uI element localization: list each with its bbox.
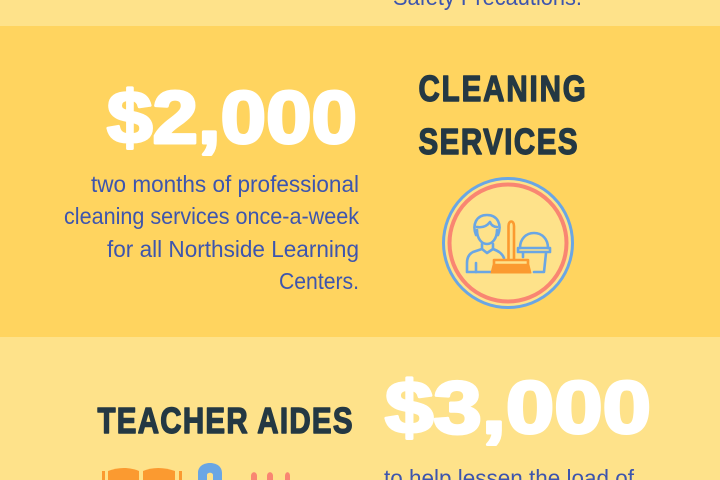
heading: cleaning services: SERVICES <box>418 121 578 162</box>
amount: $3,000: $3,000 <box>385 366 651 449</box>
icon: open book <box>102 468 182 480</box>
panel: teacher aides <box>0 337 720 480</box>
icon: blue arch <box>198 463 222 480</box>
icon: cleaner with broom and bucket <box>444 178 572 308</box>
text: cleaning description: for all Northside Learning <box>107 236 359 262</box>
heading: cleaning services: CLEANING <box>418 68 586 109</box>
text: cleaning description <box>64 171 359 294</box>
icon: red bars <box>251 472 290 480</box>
text: cleaning description: cleaning services once-a-week <box>64 203 359 229</box>
text: cleaning description: two months of professional <box>91 171 359 197</box>
panel: top band <box>0 0 720 26</box>
heading: teacher aides: TEACHER AIDES <box>98 400 353 441</box>
heading: cleaning services <box>418 68 586 162</box>
text: cleaning description: Centers. <box>279 268 359 294</box>
panel: cleaning services <box>0 26 720 337</box>
amount: $2,000: $2,000 <box>107 76 357 159</box>
